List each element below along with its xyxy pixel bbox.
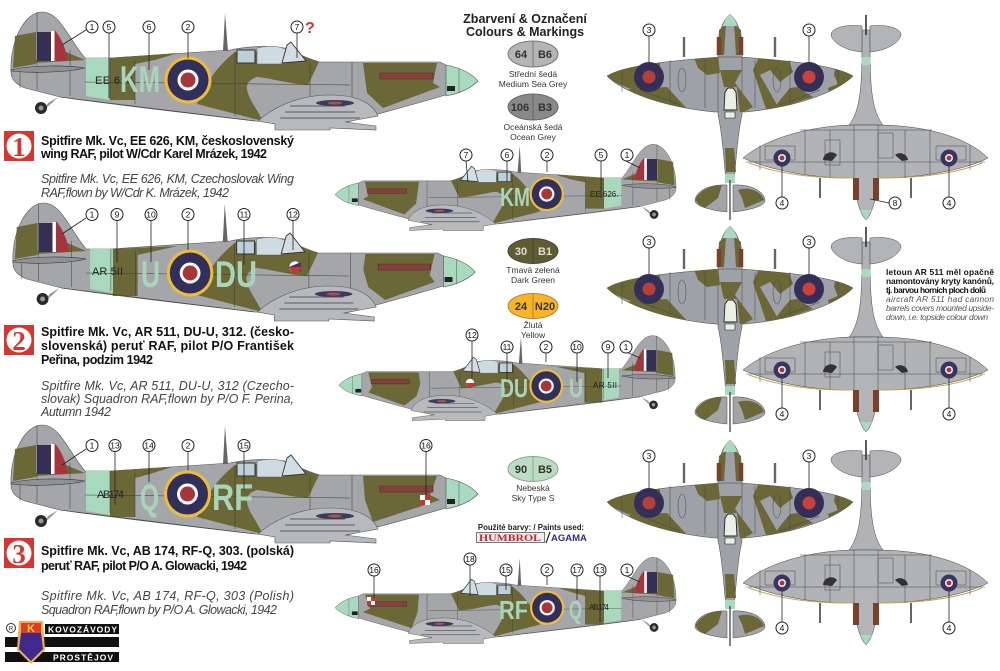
aircraft 2 side view right <box>339 336 675 421</box>
callouts aircraft 1 right: 6 <box>505 150 510 160</box>
callouts aircraft 1 right <box>460 149 640 198</box>
swatch: sky type s: 90 <box>515 464 527 476</box>
swatch: dark green: 30 <box>515 246 527 258</box>
top view aircraft 2 <box>600 226 860 432</box>
plan view callouts row 2: 3 <box>647 237 652 247</box>
aircraft 3 side view right: AB 174 <box>589 603 610 612</box>
plan view callouts row 1: 8 <box>893 198 898 208</box>
plan view callouts row 1: 4 <box>947 198 952 208</box>
aircraft 3 side view left: AB174 <box>97 489 124 501</box>
swatch: ocean grey <box>503 94 563 142</box>
paints used brands <box>476 523 587 544</box>
callouts aircraft 3 right: 17 <box>572 565 582 575</box>
callouts aircraft 1 left: 1 <box>90 22 95 32</box>
note on AR 511: barrels covers mounted upside- <box>886 303 994 313</box>
top view aircraft 1 <box>600 14 860 220</box>
callouts aircraft 3 left <box>62 440 432 505</box>
plan view callouts row 3: 4 <box>780 623 785 633</box>
callouts aircraft 2 right: 2 <box>544 342 549 352</box>
aircraft 3 side view right <box>335 557 676 644</box>
callouts aircraft 2 left: 1 <box>90 210 95 220</box>
caption 3 english: Squadron RAF,flown by P/O A. Glowacki, 1942 <box>41 603 277 617</box>
aircraft 3 side view right: Q <box>569 595 582 625</box>
swatch: sky type s <box>508 456 558 503</box>
aircraft 3 side view left <box>11 425 478 543</box>
caption 2 english: slovak) Squadron RAF,flown by P/O F. Perina, <box>41 392 294 406</box>
plan view callouts row 2: 4 <box>947 409 952 419</box>
callouts aircraft 2 left: 11 <box>240 210 249 220</box>
logo: Kovozávody Prostějov <box>5 621 119 664</box>
plan view callouts row 3: 4 <box>947 623 952 633</box>
aircraft 1 side view right: KM <box>500 182 530 212</box>
badge 3: 3 <box>12 539 26 569</box>
badge 1 <box>4 131 34 162</box>
caption 3 czech: peruť RAF, pilot P/O A. Glowacki, 1942 <box>41 559 247 573</box>
swatch: yellow: N20 <box>535 301 555 313</box>
aircraft 3 side view right: RF <box>499 595 528 625</box>
callouts aircraft 1 left <box>62 20 315 98</box>
swatch: ocean grey: B3 <box>538 102 552 114</box>
swatch: medium sea grey: 64 <box>515 49 528 61</box>
callouts aircraft 2 right <box>466 329 640 382</box>
callouts aircraft 3 right <box>368 553 640 622</box>
underside view aircraft 1 <box>743 15 988 220</box>
callouts aircraft 3 right: 18 <box>465 554 475 564</box>
callouts aircraft 3 left: 13 <box>110 440 120 450</box>
aircraft 2 side view left: AR 5II <box>92 266 123 278</box>
swatch: yellow: Yellow <box>521 330 546 340</box>
callouts aircraft 3 left: 14 <box>144 440 154 450</box>
swatch: yellow: 24 <box>515 301 528 313</box>
paints used brands: AGAMA <box>551 533 587 544</box>
swatch: sky type s: B5 <box>538 464 552 476</box>
callouts aircraft 1 left: 6 <box>147 22 152 32</box>
callouts aircraft 2 right: 1 <box>624 342 629 352</box>
callouts aircraft 2 left: 10 <box>146 210 156 220</box>
swatch: dark green <box>506 238 560 285</box>
callouts aircraft 2 left: 12 <box>288 210 298 220</box>
aircraft 2 side view left: DU <box>215 254 257 295</box>
aircraft 1 side view left: EE 626 <box>95 75 133 87</box>
callouts aircraft 1 right: 1 <box>625 150 630 160</box>
aircraft 2 side view right: DU <box>500 373 528 403</box>
badge 1: 1 <box>12 132 26 162</box>
title: Zbarvení & Označení <box>463 12 587 26</box>
caption 3 czech: Spitfire Mk. Vc, AB 174, RF-Q, 303. (polská) <box>41 544 294 558</box>
plan view callouts row 3 <box>643 450 955 634</box>
callouts aircraft 3 right: 13 <box>595 565 605 575</box>
aircraft 1 side view left: KM <box>120 59 160 100</box>
caption 1 english: RAF,flown by W/Cdr K. Mrázek, 1942 <box>41 186 229 200</box>
note on AR 511: aircraft AR 511 had cannon <box>886 294 994 304</box>
caption 2 english <box>40 379 294 419</box>
swatch: medium sea grey <box>499 41 568 89</box>
plan view callouts row 1: 3 <box>647 25 652 35</box>
underside view aircraft 3 <box>743 440 988 645</box>
note on AR 511: down, i.e. topside colour down <box>886 312 988 322</box>
aircraft 3 side view left: RF <box>212 477 253 518</box>
caption 1 english: Spitfire Mk. Vc, EE 626, KM, Czechoslovak Wing <box>41 172 294 186</box>
plan view callouts row 2 <box>643 236 955 420</box>
logo: Kovozávody Prostějov: K <box>27 623 35 635</box>
swatch: sky type s: Nebeská <box>516 483 550 493</box>
callouts aircraft 2 left <box>62 208 299 265</box>
callouts aircraft 1 right: 2 <box>545 150 550 160</box>
caption 1 czech <box>40 134 294 161</box>
aircraft 3 side view left: Q <box>140 477 159 518</box>
top view aircraft 3 <box>600 440 860 646</box>
caption 2 czech: slovenská) peruť RAF, pilot P/O František <box>41 339 294 353</box>
callouts aircraft 1 right: 7 <box>464 150 469 160</box>
aircraft 1 side view left <box>11 12 478 130</box>
callouts aircraft 3 left: 1 <box>90 440 95 450</box>
caption 2 czech: Peřina, podzim 1942 <box>41 353 153 367</box>
caption 3 english <box>41 589 294 617</box>
aircraft 1 side view right: EE 626. <box>590 190 618 199</box>
plan view callouts row 2: 4 <box>780 409 785 419</box>
caption 3 czech <box>41 544 294 573</box>
plan view callouts row 1: 3 <box>807 25 812 35</box>
callouts aircraft 1 right: 5 <box>599 150 604 160</box>
swatch: dark green: B1 <box>538 246 552 258</box>
caption 2 english: Spitfire Mk. Vc, AR 511, DU-U, 312 (Czecho- <box>41 379 294 393</box>
swatch: yellow: Žlutá <box>524 320 543 330</box>
swatch: ocean grey: Oceánská šedá <box>503 122 563 132</box>
callouts aircraft 1 left: ? <box>305 20 315 37</box>
callouts aircraft 2 right: 10 <box>572 342 582 352</box>
badge 3 <box>4 538 34 569</box>
note on AR 511 <box>886 267 994 322</box>
paints used brands: Použité barvy: / Paints used: <box>478 523 584 532</box>
aircraft 2 side view left: U <box>141 254 160 295</box>
callouts aircraft 1 left: 5 <box>107 22 112 32</box>
plan view callouts row 3: 3 <box>647 451 652 461</box>
callouts aircraft 2 left: 9 <box>115 210 120 220</box>
plan view callouts row 1 <box>643 24 955 209</box>
callouts aircraft 2 right: 9 <box>606 342 611 352</box>
swatch: yellow <box>508 294 558 340</box>
badge 2 <box>4 325 34 356</box>
callouts aircraft 3 right: 2 <box>545 565 550 575</box>
callouts aircraft 1 left: 2 <box>186 22 191 32</box>
callouts aircraft 1 left: 7 <box>295 22 300 32</box>
title: Colours & Markings <box>466 25 584 39</box>
callouts aircraft 3 right: 15 <box>501 565 511 575</box>
logo: Kovozávody Prostějov: R <box>9 626 14 632</box>
note on AR 511: letoun AR 511 měl opačně <box>886 267 994 277</box>
underside view aircraft 2 <box>743 227 988 432</box>
callouts aircraft 3 right: 1 <box>625 565 630 575</box>
callouts aircraft 3 left: 16 <box>421 440 431 450</box>
callouts aircraft 2 right: 12 <box>467 330 477 340</box>
callouts aircraft 3 left: 15 <box>239 440 249 450</box>
swatch: medium sea grey: Medium Sea Grey <box>499 79 568 89</box>
plan view callouts row 3: 3 <box>807 451 812 461</box>
callouts aircraft 2 left: 2 <box>186 210 191 220</box>
caption 3 english: Spitfire Mk. Vc, AB 174, RF-Q, 303 (Polish) <box>41 589 294 603</box>
swatch: dark green: Dark Green <box>511 275 555 285</box>
caption 1 czech: wing RAF, pilot W/Cdr Karel Mrázek, 1942 <box>40 147 267 161</box>
swatch: medium sea grey: B6 <box>538 49 552 61</box>
callouts aircraft 3 left: 2 <box>186 440 191 450</box>
note on AR 511: tj. barvou horních ploch dolů <box>886 285 986 295</box>
caption 1 english <box>41 172 294 200</box>
caption 2 english: Autumn 1942 <box>40 405 111 419</box>
aircraft 2 side view right: U <box>569 373 583 403</box>
logo: Kovozávody Prostějov: PROSTĚJOV <box>53 652 113 662</box>
swatch: sky type s: Sky Type S <box>512 493 555 503</box>
swatch: dark green: Tmavá zelená <box>506 265 560 275</box>
title <box>463 12 587 39</box>
note on AR 511: namontovány kryty kanónů, <box>886 276 994 286</box>
callouts aircraft 3 right: 16 <box>369 565 379 575</box>
callouts aircraft 2 right: 11 <box>503 342 512 352</box>
caption 1 czech: Spitfire Mk. Vc, EE 626, KM, československý <box>41 134 294 148</box>
swatch: medium sea grey: Střední šedá <box>509 69 557 79</box>
aircraft 2 side view left <box>13 203 475 321</box>
logo: Kovozávody Prostějov: KOVOZÁVODY <box>48 624 117 634</box>
swatch: ocean grey: Ocean Grey <box>510 132 557 142</box>
plan view callouts row 1: 4 <box>780 198 785 208</box>
aircraft 2 side view right: AR 5II <box>593 381 617 390</box>
paints used brands: HUMBROL <box>479 534 541 544</box>
plan view callouts row 2: 3 <box>807 237 812 247</box>
caption 2 czech: Spitfire Mk. Vc, AR 511, DU-U, 312. (česko- <box>41 325 294 339</box>
aircraft 1 side view right <box>335 144 676 231</box>
badge 2: 2 <box>12 326 26 356</box>
swatch: ocean grey: 106 <box>511 102 529 114</box>
caption 2 czech <box>41 325 294 367</box>
